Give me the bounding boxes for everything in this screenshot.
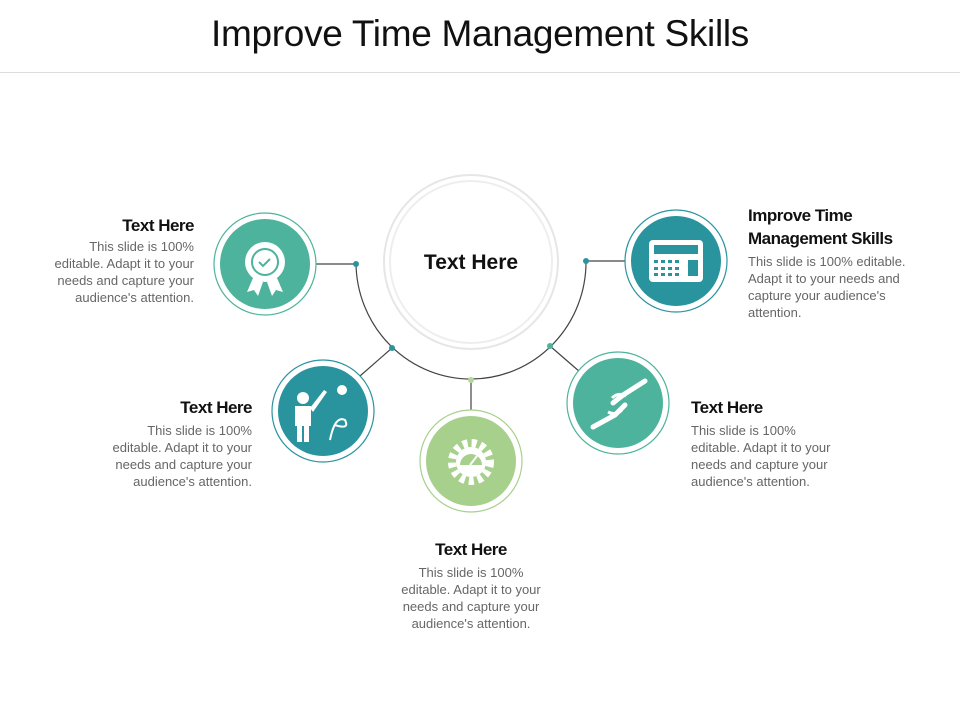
text block: left lower: This slide is 100% editable. Adapt it to your needs and capture your audience's attention. xyxy=(113,423,252,489)
icon circle: gauge gear xyxy=(420,410,522,512)
connector arc xyxy=(316,261,625,413)
text block: left lower: Text Here xyxy=(180,398,252,417)
text block: right lower: Text Here xyxy=(691,398,763,417)
text block: bottom: Text Here xyxy=(435,540,507,559)
text block: right lower: This slide is 100% editable. Adapt it to your needs and capture your audience's attention. xyxy=(691,423,830,489)
divider xyxy=(0,72,960,73)
center circle: Text Here xyxy=(424,251,518,274)
text block: top right: This slide is 100% editable. Adapt it to your needs and capture your audience's attention. xyxy=(748,254,906,320)
text block: top right: Improve Time Management Skills xyxy=(748,206,893,248)
center circle xyxy=(384,175,558,349)
dots xyxy=(353,258,589,383)
text block: bottom: This slide is 100% editable. Adapt it to your needs and capture your audience's attention. xyxy=(401,565,541,631)
text block: top left: This slide is 100% editable. Adapt it to your needs and capture your audience's attention. xyxy=(55,239,194,305)
title: Improve Time Management Skills xyxy=(211,13,749,54)
icon circle: award xyxy=(214,213,316,315)
text block: top left: Text Here xyxy=(122,216,194,235)
icon circle: person idea xyxy=(272,360,374,462)
icon circle: hands xyxy=(567,352,669,454)
icon circle: calculator xyxy=(625,210,727,312)
text block: top right xyxy=(748,206,906,320)
